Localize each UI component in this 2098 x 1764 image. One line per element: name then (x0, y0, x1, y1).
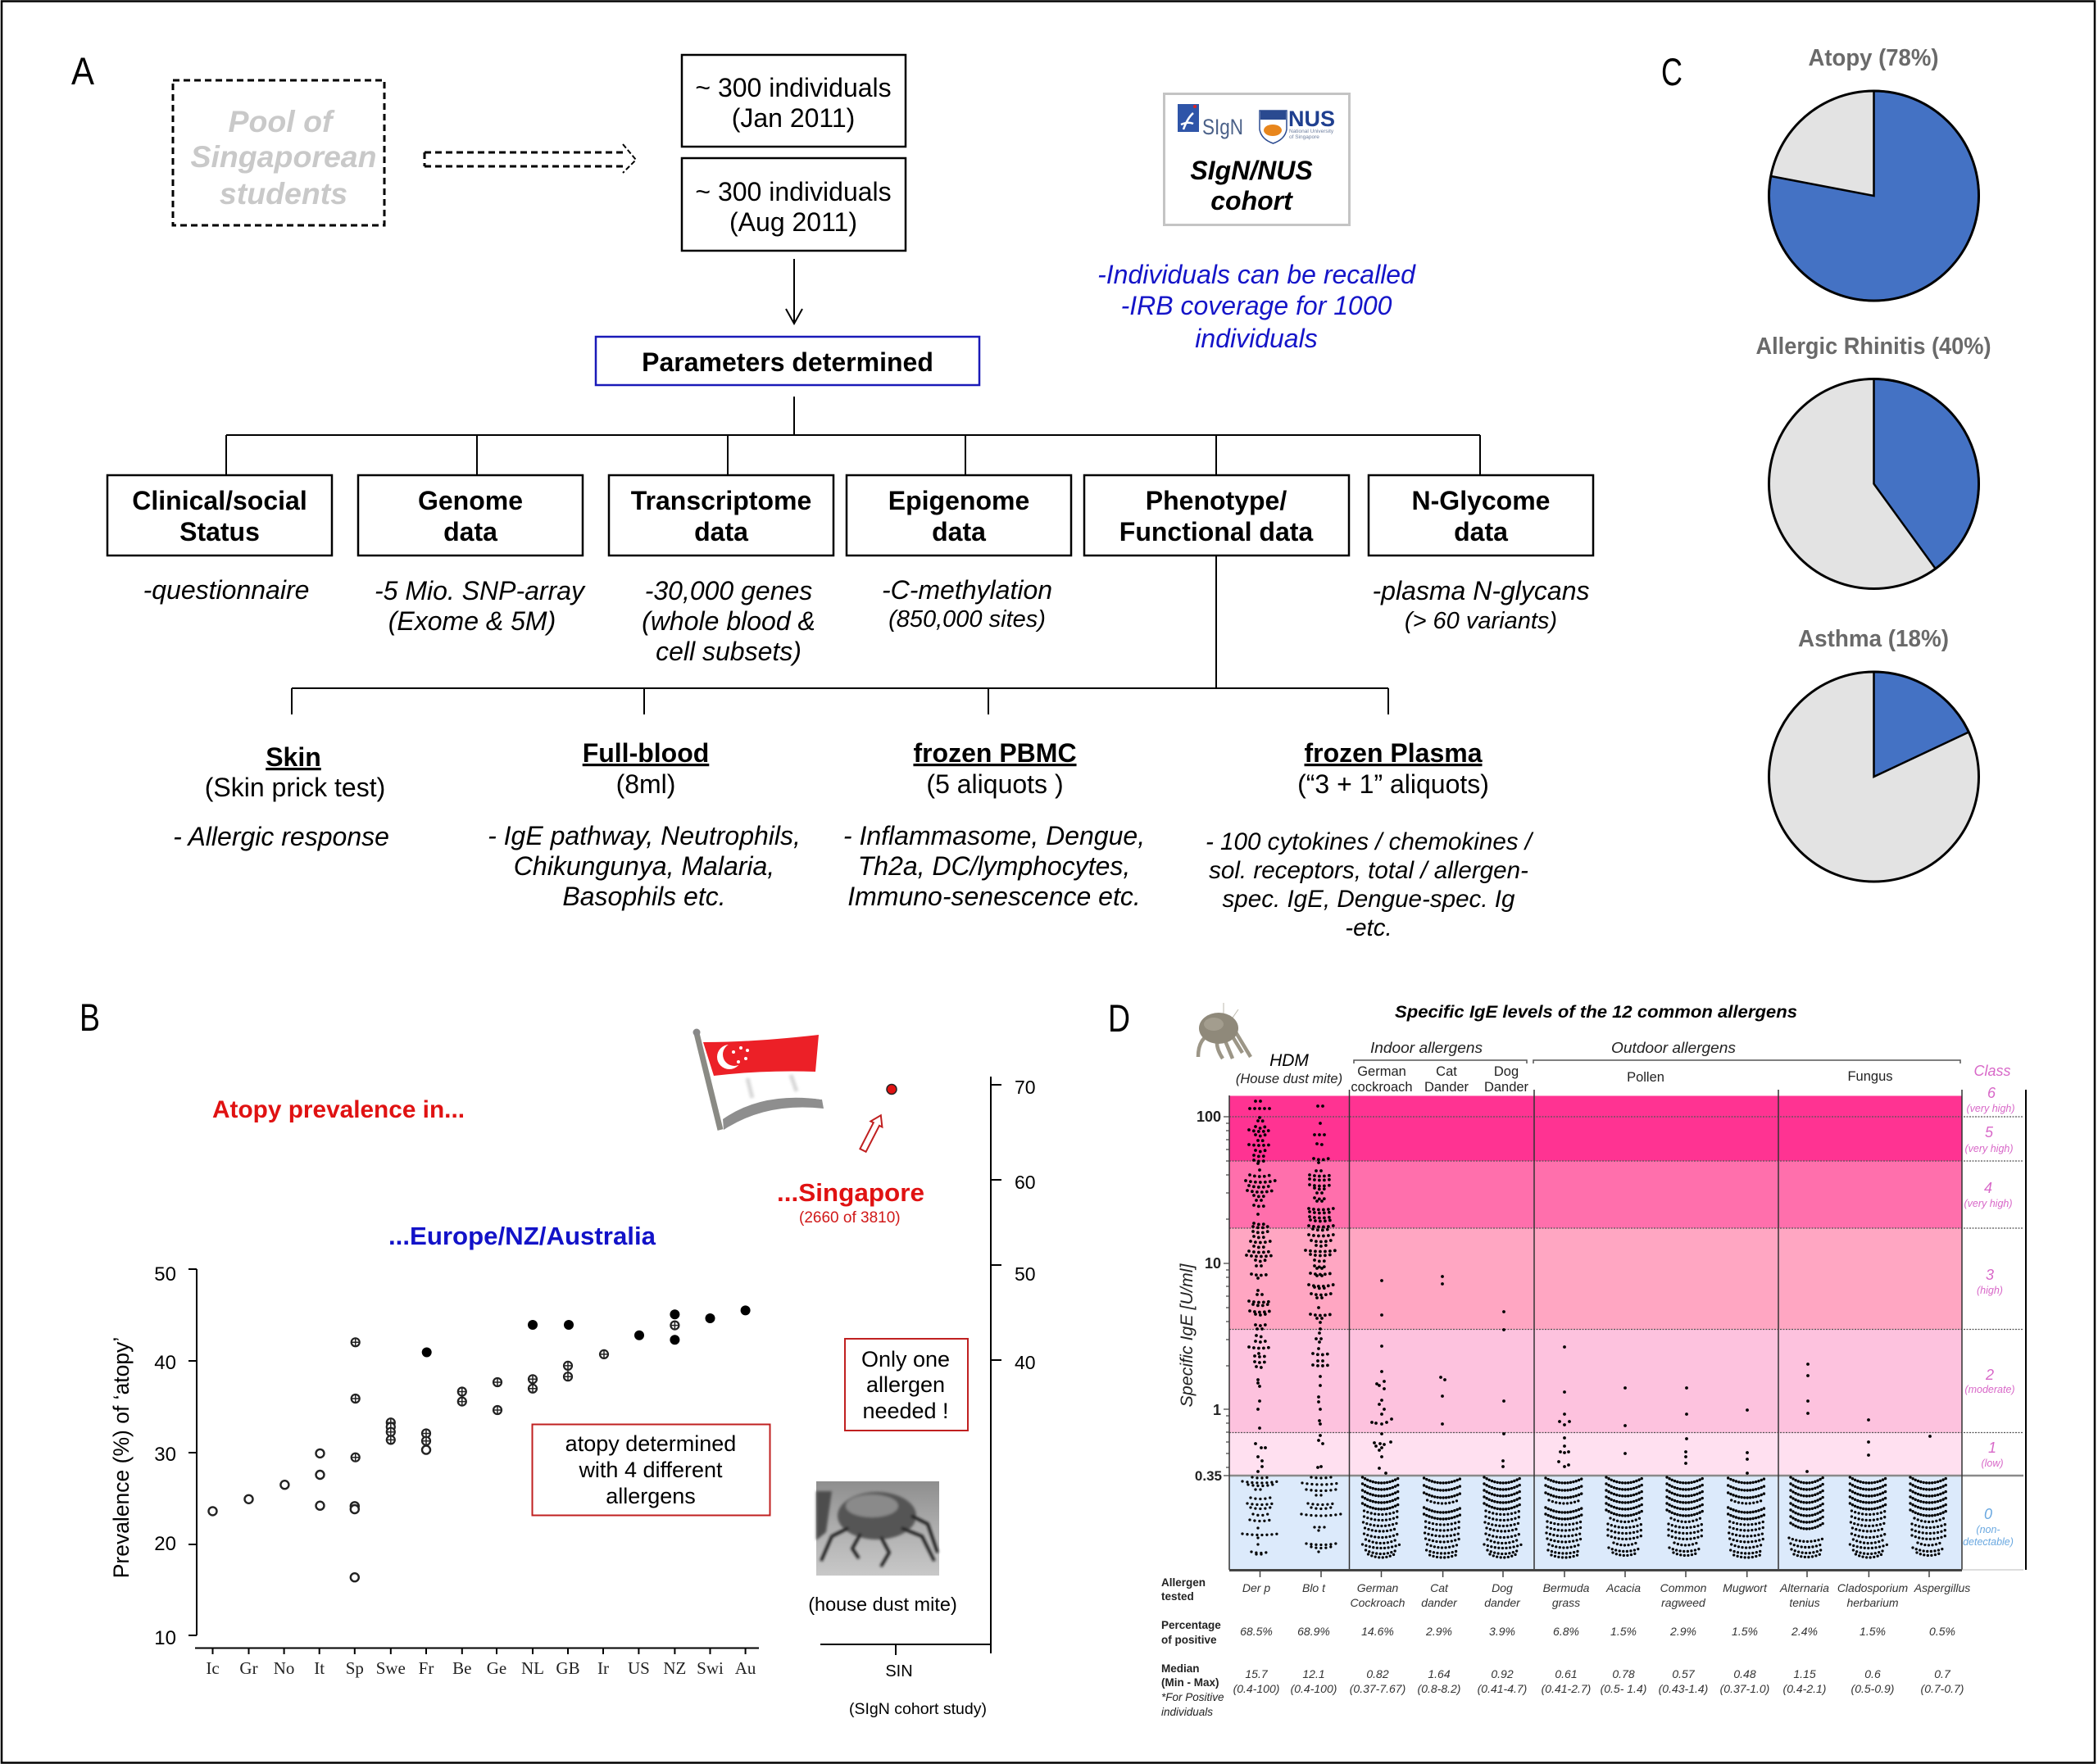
table: median and range: 0.48 (1733, 1667, 1756, 1680)
y axis labels: 100 (1197, 1109, 1221, 1125)
table: percentage of positive: 1.5% (1860, 1625, 1886, 1638)
caption: house dust mite: (house dust mite) (808, 1594, 957, 1615)
box: parameters determined: Parameters determined (642, 347, 933, 377)
data point: Singapore (887, 1085, 897, 1095)
table: allergen tested: dander (1484, 1596, 1521, 1609)
block: frozen plasma: -etc. (1345, 914, 1392, 941)
block: full blood: (8ml) (616, 769, 675, 799)
table: median and range: 0.6 (1864, 1667, 1881, 1680)
scatter: filled points (422, 1305, 751, 1357)
icon: dust mite (1198, 1003, 1251, 1059)
block: frozen PBMC: (5 aliquots ) (926, 769, 1064, 799)
callout: four allergens: with 4 different (578, 1458, 723, 1482)
label: Singapore: ...Singapore (777, 1178, 924, 1207)
dot plot: positive values of the other allergens (1372, 1277, 1930, 1473)
class labels: 6 (1987, 1085, 1996, 1101)
right axis: Singapore cohort (820, 1077, 1036, 1718)
callout: four allergens (533, 1424, 770, 1516)
label: Europe/NZ/Australia: ...Europe/NZ/Australia (388, 1222, 656, 1250)
text: epigenome description: -C-methylation (882, 575, 1052, 605)
group header: outdoor allergens: Fungus (1847, 1069, 1893, 1084)
scatter: open points (208, 1446, 430, 1581)
pie: atopy 78%: Atopy (78%) (1808, 45, 1939, 71)
block: frozen plasma: - 100 cytokines / chemokines / (1206, 828, 1534, 855)
group header: indoor allergens: Dog (1494, 1064, 1519, 1079)
y axis labels: 1 (1213, 1402, 1221, 1418)
block: frozen PBMC: - Inflammasome, Dengue, (843, 821, 1145, 850)
table: allergen tested: Cladosporium (1837, 1581, 1909, 1594)
panel C: prevalence pies (1661, 45, 1991, 882)
panel D: specific IgE levels (1108, 996, 2026, 1718)
box: phenotype data: Functional data (1119, 517, 1313, 546)
table: median and range: 0.92 (1491, 1667, 1514, 1680)
class labels: (very high) (1966, 1103, 2015, 1114)
table: allergen tested: Bermuda (1543, 1581, 1590, 1594)
box: transcriptome data: Transcriptome (631, 486, 811, 515)
table: median and range: (0.37-7.67) (1350, 1682, 1405, 1695)
box: August group (682, 158, 906, 251)
pie: allergic rhinitis 40%: Allergic Rhinitis (40%) (1755, 333, 1991, 360)
box: clinical/social status: Clinical/social (132, 486, 307, 515)
text: genome description: (Exome & 5M) (388, 606, 556, 636)
table: median and range: (0.5-0.9) (1851, 1682, 1894, 1695)
panel letter D: D (1108, 996, 1130, 1040)
panel letter A: A (71, 49, 95, 93)
callout: one allergen (845, 1339, 968, 1431)
table: median and range: 1.64 (1428, 1667, 1451, 1680)
box: transcriptome data: data (694, 517, 748, 546)
box: epigenome data: Epigenome (888, 486, 1029, 515)
table: median and range (1161, 1662, 1964, 1718)
text: cohort notes: individuals (1195, 324, 1318, 353)
table: percentage of positive: 3.9% (1489, 1625, 1515, 1638)
table: median and range: *For Positive (1161, 1691, 1224, 1703)
icon: NUS logo: of Singapore (1289, 134, 1319, 140)
table: median and range: individuals (1161, 1706, 1213, 1718)
text: N-glycome description (1373, 576, 1589, 634)
dashed box: pool of students: students (220, 176, 347, 211)
class labels: 0 (1984, 1506, 1992, 1522)
y axis labels: 0.35 (1195, 1468, 1222, 1484)
table: allergen tested: tested (1161, 1590, 1194, 1603)
dot plot: Blo t (1301, 1106, 1341, 1552)
x axis: countries: Ge (487, 1658, 506, 1678)
table: percentage of positive: 1.5% (1732, 1625, 1758, 1638)
icon: NUS logo (1260, 107, 1335, 143)
x axis: countries: Swe (376, 1658, 406, 1678)
table: allergen tested: Common (1660, 1581, 1707, 1594)
box: parameters determined (596, 337, 979, 385)
box: genome data: data (443, 517, 497, 546)
table: median and range: (0.37-1.0) (1720, 1682, 1769, 1695)
table: median and range: Median (1161, 1662, 1200, 1675)
block: full blood: Basophils etc. (562, 882, 726, 911)
group header: indoor allergens: Dander (1484, 1080, 1529, 1095)
table: allergen tested: Cockroach (1351, 1596, 1405, 1609)
x axis: countries: NL (521, 1658, 544, 1678)
table: percentage of positive: 68.9% (1297, 1625, 1330, 1638)
arrow: to parameters (786, 259, 802, 324)
table: median and range: 0.82 (1366, 1667, 1389, 1680)
box: N-glycome data (1369, 475, 1593, 556)
column header: HDM: HDM (1269, 1051, 1309, 1070)
box: phenotype data (1084, 475, 1349, 556)
block: skin: Skin (266, 742, 321, 772)
class boundaries (1229, 1117, 2023, 1432)
text: N-glycome description: (> 60 variants) (1405, 608, 1557, 634)
x axis: countries: Ir (597, 1658, 609, 1678)
x axis: countries (195, 1648, 759, 1678)
table: allergen tested: grass (1552, 1596, 1580, 1609)
table: median and range: (0.7-0.7) (1921, 1682, 1964, 1695)
x axis: countries: US (628, 1658, 650, 1678)
x axis: countries: Be (452, 1658, 471, 1678)
box: N-glycome data: data (1454, 517, 1508, 546)
table: percentage of positive (1161, 1619, 1955, 1646)
table: percentage of positive: 2.9% (1425, 1625, 1452, 1638)
block: frozen PBMC (843, 738, 1145, 911)
label: Singapore (777, 1178, 924, 1227)
table: allergen tested: herbarium (1846, 1596, 1899, 1609)
title: Specific IgE levels of the 12 common allergens (1395, 1002, 1797, 1022)
block: frozen PBMC: Th2a, DC/lymphocytes, (858, 851, 1130, 881)
icon: SIgN logo: SIgN (1202, 115, 1243, 139)
x axis: countries: Au (735, 1658, 756, 1678)
class labels: 5 (1985, 1124, 1994, 1140)
table: median and range: (0.41-4.7) (1478, 1682, 1527, 1695)
block: frozen plasma: sol. receptors, total / allergen- (1209, 857, 1528, 884)
left axis: prevalence: 30 (154, 1444, 176, 1466)
x axis: countries: Ic (206, 1658, 220, 1678)
table: median and range: 0.61 (1555, 1667, 1578, 1680)
table: median and range: 1.15 (1793, 1667, 1816, 1680)
box: January group: ~ 300 individuals (695, 73, 892, 102)
class labels (1963, 1063, 2015, 1548)
class labels: (low) (1981, 1458, 2004, 1469)
connector tree (226, 397, 1480, 475)
right axis: Singapore cohort: SIN (885, 1662, 913, 1680)
block: frozen plasma: frozen Plasma (1305, 738, 1483, 768)
table: percentage of positive: 2.4% (1791, 1625, 1818, 1638)
callout: one allergen: needed ! (862, 1399, 949, 1423)
icon: SIgN logo (1178, 104, 1243, 139)
class labels: (non- (1976, 1524, 2000, 1535)
group header: indoor allergens: cockroach (1351, 1080, 1413, 1095)
box: epigenome data: data (932, 517, 986, 546)
callout: four allergens: allergens (606, 1484, 696, 1508)
icon: NUS logo: National University (1289, 129, 1334, 134)
text: transcriptome description (642, 576, 815, 666)
table: median and range: 0.7 (1934, 1667, 1951, 1680)
table: allergen tested: Aspergillus (1914, 1581, 1970, 1594)
table: allergen tested: dander (1421, 1596, 1458, 1609)
panel letter C: C (1661, 50, 1682, 93)
left axis: prevalence: 10 (154, 1627, 176, 1649)
class labels: 2 (1985, 1367, 1994, 1383)
table: percentage of positive: 2.9% (1669, 1625, 1696, 1638)
pie: asthma 18%: Asthma (18%) (1798, 626, 1949, 652)
table: allergen tested: Mugwort (1723, 1581, 1768, 1594)
table: median and range: 12.1 (1302, 1667, 1325, 1680)
box: January group: (Jan 2011) (732, 103, 855, 133)
class labels: 3 (1986, 1267, 1994, 1283)
column header: HDM (1236, 1051, 1342, 1086)
x axis: countries: Gr (239, 1658, 258, 1678)
text: genome description: -5 Mio. SNP-array (375, 576, 586, 605)
right axis: Singapore cohort: 40 (1015, 1352, 1036, 1373)
block: frozen PBMC: Immuno-senescence etc. (847, 882, 1141, 911)
table: percentage of positive: 68.5% (1240, 1625, 1273, 1638)
table: percentage of positive: 6.8% (1553, 1625, 1579, 1638)
y axis labels: 10 (1205, 1255, 1221, 1272)
class labels: (very high) (1964, 1198, 2013, 1209)
right axis: Singapore cohort: 70 (1015, 1077, 1036, 1098)
table: median and range: (0.43-1.4) (1659, 1682, 1708, 1695)
group header: outdoor allergens: Pollen (1627, 1070, 1664, 1085)
table: percentage of positive: 1.5% (1610, 1625, 1637, 1638)
table: median and range: (0.4-2.1) (1783, 1682, 1826, 1695)
dot plot: Der p (1242, 1101, 1278, 1554)
table: median and range: (Min - Max) (1161, 1676, 1219, 1689)
block: skin: (Skin prick test) (205, 773, 385, 802)
box: January group (682, 55, 906, 147)
table: median and range: (0.8-8.2) (1418, 1682, 1460, 1695)
block: full blood: Chikungunya, Malaria, (514, 851, 774, 881)
table: percentage of positive: of positive (1161, 1634, 1217, 1646)
table: percentage of positive: 0.5% (1929, 1625, 1955, 1638)
x axis: countries: NZ (663, 1658, 686, 1678)
table: median and range: (0.4-100) (1233, 1682, 1279, 1695)
class labels: 1 (1988, 1440, 1996, 1456)
table: allergen tested: tenius (1789, 1596, 1820, 1609)
block: frozen plasma: (“3 + 1” aliquots) (1297, 769, 1489, 799)
dot plot: non-detectable swarms (1362, 1477, 1948, 1558)
label: Singapore: (2660 of 3810) (799, 1209, 901, 1227)
table: median and range: (0.5- 1.4) (1601, 1682, 1646, 1695)
group header: indoor allergens (1351, 1040, 1529, 1095)
block: full blood (488, 738, 801, 911)
table: median and range: (0.41-2.7) (1542, 1682, 1591, 1695)
image: house dust mite photo (816, 1481, 939, 1576)
x axis: countries: No (274, 1658, 294, 1678)
left axis: prevalence: 40 (154, 1352, 176, 1374)
block: skin: - Allergic response (173, 822, 389, 851)
class labels: (moderate) (1964, 1384, 2015, 1395)
heading: atopy prevalence: Atopy prevalence in... (212, 1096, 465, 1123)
block: skin (173, 742, 389, 851)
table: allergen tested: Acacia (1605, 1581, 1641, 1594)
box: August group: ~ 300 individuals (695, 177, 892, 206)
dashed box: pool of students: Singaporean (190, 139, 377, 174)
block: frozen PBMC: frozen PBMC (913, 738, 1077, 768)
callout: one allergen: allergen (866, 1372, 945, 1397)
text: clinical description: -questionnaire (143, 575, 309, 605)
text: cohort notes: -Individuals can be recalled (1097, 260, 1416, 289)
class labels: (very high) (1964, 1143, 2014, 1154)
block: frozen plasma: spec. IgE, Dengue-spec. Ig (1223, 886, 1515, 913)
block: full blood: - IgE pathway, Neutrophils, (488, 821, 801, 850)
table: allergen tested: German (1357, 1581, 1398, 1594)
x axis: countries: Swi (697, 1658, 724, 1678)
table: allergen tested: Alternaria (1779, 1581, 1829, 1594)
text: epigenome description: (850,000 sites) (888, 606, 1046, 633)
group header: outdoor allergens (1533, 1040, 1960, 1085)
text: cohort notes (1097, 260, 1416, 353)
dashed box: pool of students: Pool of (228, 104, 335, 138)
table: median and range: (0.4-100) (1291, 1682, 1337, 1695)
box: genome data: Genome (418, 486, 523, 515)
group header: indoor allergens: Cat (1436, 1064, 1457, 1079)
icon: Singapore flag (693, 1029, 824, 1130)
right axis: Singapore cohort: 50 (1015, 1263, 1036, 1285)
block: frozen plasma (1206, 738, 1534, 941)
y axis labels: Specific IgE [U/ml] (1178, 1263, 1197, 1408)
axes and grid lines (1224, 1090, 2026, 1577)
pie: atopy 78% (1769, 45, 1979, 301)
group header: indoor allergens: German (1357, 1064, 1406, 1079)
text: transcriptome description: -30,000 genes (645, 576, 812, 605)
block: full blood: Full-blood (583, 738, 709, 768)
x axis: countries: Sp (346, 1658, 364, 1678)
panel A: cohort flow chart (71, 49, 1593, 941)
text: transcriptome description: cell subsets) (656, 637, 802, 666)
table: allergen tested: Dog (1492, 1581, 1513, 1594)
right axis: Singapore cohort: 60 (1015, 1172, 1036, 1193)
right axis: Singapore cohort: (SIgN cohort study) (849, 1700, 987, 1718)
background bands: IgE classes (1229, 1096, 1962, 1570)
text: cohort notes: -IRB coverage for 1000 (1121, 291, 1392, 320)
box: N-glycome data: N-Glycome (1412, 486, 1550, 515)
table: median and range: 15.7 (1245, 1667, 1269, 1680)
pie: allergic rhinitis 40% (1755, 333, 1991, 588)
column header: HDM: (House dust mite) (1236, 1072, 1342, 1086)
x axis: countries: Fr (419, 1658, 434, 1678)
class labels: Class (1973, 1063, 2011, 1079)
box: August group: (Aug 2011) (729, 207, 857, 237)
arrow: to Singapore point (860, 1115, 882, 1152)
x axis: countries: GB (556, 1658, 580, 1678)
x axis: countries: It (314, 1658, 325, 1678)
left axis: prevalence: Prevalence (%) of ‘atopy’ (109, 1337, 134, 1578)
table: allergen tested (1161, 1576, 1970, 1609)
callout: four allergens: atopy determined (565, 1431, 736, 1456)
class labels: 4 (1984, 1180, 1992, 1196)
panel letter B: B (79, 995, 100, 1039)
left axis: prevalence: 50 (154, 1263, 176, 1286)
table: percentage of positive: 14.6% (1361, 1625, 1394, 1638)
box: SIgN/NUS logos (1164, 93, 1349, 224)
left axis: prevalence: 20 (154, 1533, 176, 1555)
callout: one allergen: Only one (861, 1347, 950, 1372)
table: allergen tested: ragweed (1661, 1596, 1706, 1609)
text: N-glycome description: -plasma N-glycans (1373, 576, 1589, 605)
box: clinical/social status: Status (179, 517, 260, 546)
table: median and range: 0.57 (1672, 1667, 1696, 1680)
table: median and range: 0.78 (1612, 1667, 1635, 1680)
table: allergen tested: Der p (1242, 1581, 1270, 1594)
connector: phenotype sub-tree (292, 556, 1388, 714)
group header: indoor allergens: Indoor allergens (1370, 1040, 1483, 1056)
panel B: atopy prevalence scatter (79, 995, 1036, 1718)
icon: NUS logo: NUS (1288, 107, 1335, 131)
table: allergen tested: Cat (1430, 1581, 1449, 1594)
box: phenotype data: Phenotype/ (1146, 486, 1287, 515)
pie: asthma 18% (1769, 626, 1978, 882)
table: allergen tested: Allergen (1161, 1576, 1206, 1589)
y axis labels (1178, 1109, 1222, 1484)
table: percentage of positive: Percentage (1161, 1619, 1221, 1631)
box: genome data (358, 475, 583, 556)
class labels: (high) (1977, 1285, 2003, 1296)
class labels: detectable) (1963, 1536, 2014, 1548)
box: SIgN/NUS logos: cohort (1210, 186, 1293, 215)
left axis: prevalence (109, 1263, 197, 1649)
arrow: dashed (425, 144, 636, 173)
box: epigenome data (847, 475, 1071, 556)
box: transcriptome data (609, 475, 833, 556)
dashed box: pool of students (173, 80, 384, 225)
text: epigenome description (882, 575, 1052, 633)
box: SIgN/NUS logos: SIgN/NUS (1190, 156, 1313, 185)
text: transcriptome description: (whole blood & (642, 606, 815, 636)
text: genome description (375, 576, 586, 636)
scatter: crossed points (352, 1322, 679, 1462)
table: allergen tested: Blo t (1302, 1581, 1326, 1594)
box: clinical/social status (107, 475, 332, 556)
group header: outdoor allergens: Outdoor allergens (1611, 1040, 1736, 1056)
group header: indoor allergens: Dander (1424, 1080, 1469, 1095)
